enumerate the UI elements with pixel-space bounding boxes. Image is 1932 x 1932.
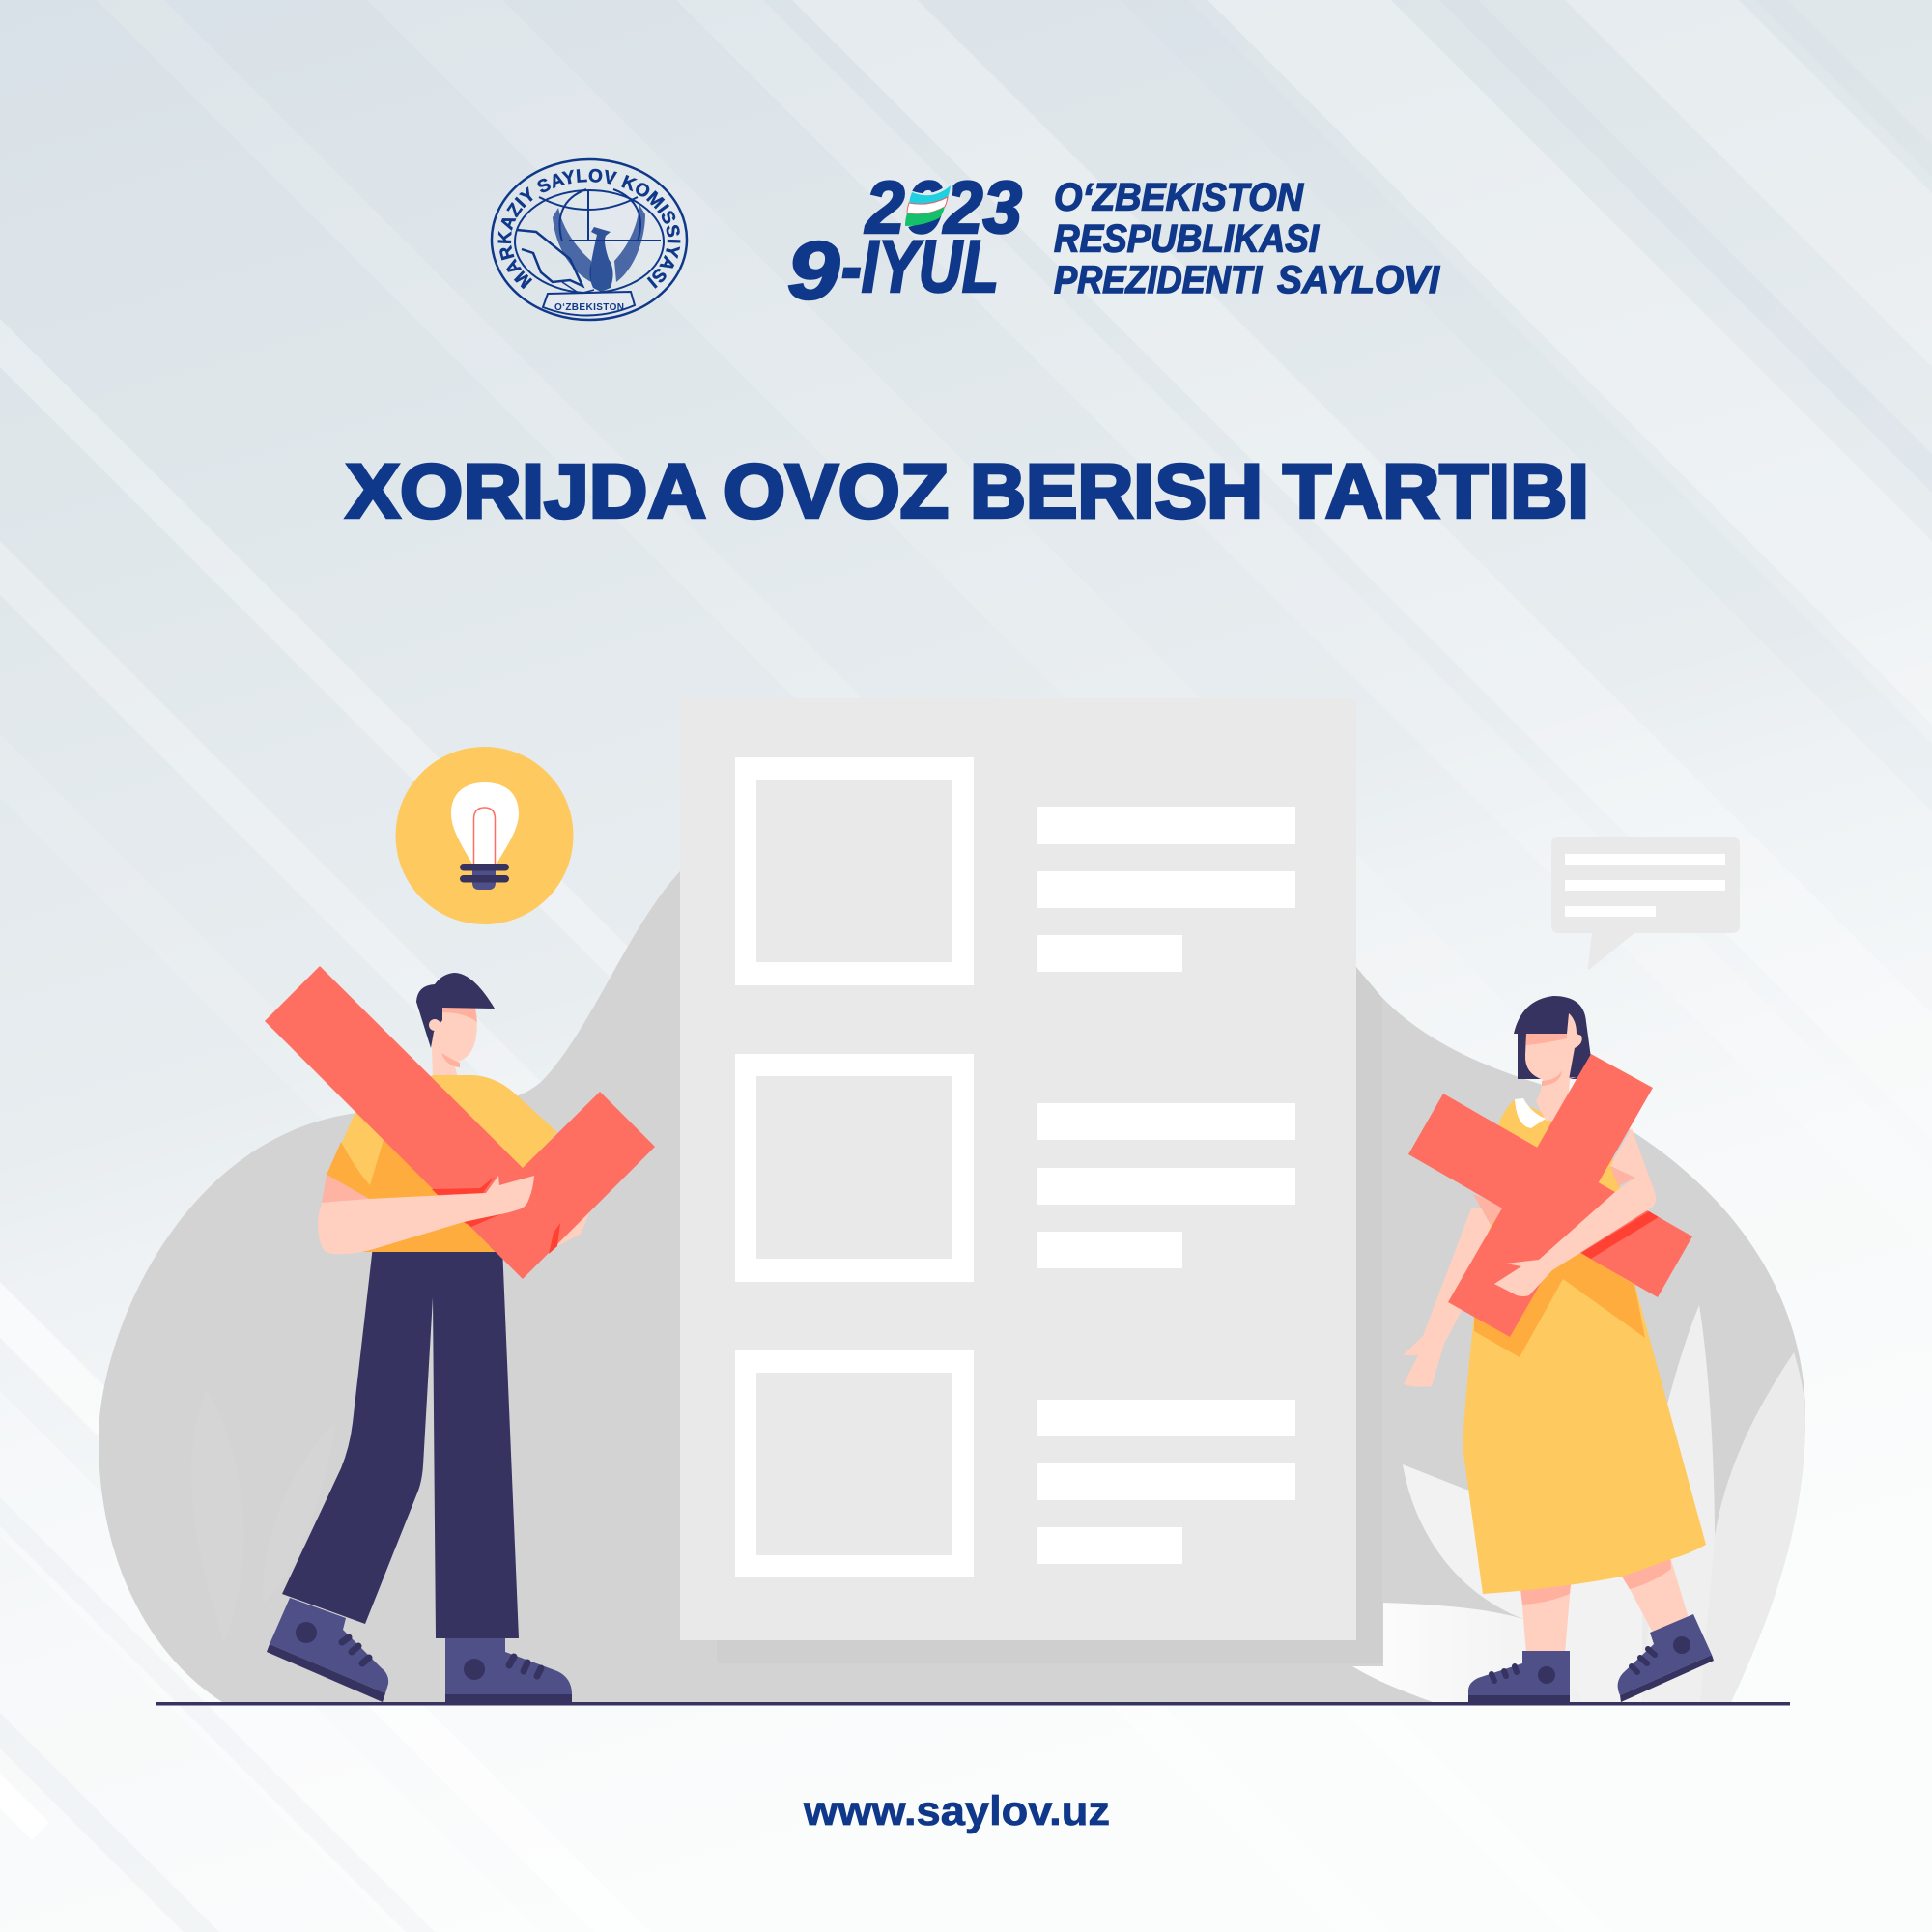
logo: election commission emblem: MARKAZIY SAYLOV KOMISSIYASI	[498, 168, 680, 290]
front shoe	[445, 1638, 572, 1703]
title	[346, 448, 1589, 533]
X mark	[1408, 1054, 1692, 1337]
arm shade	[1610, 1166, 1635, 1186]
logo: 2023 9-IYUL date mark: -IYUL	[841, 226, 999, 308]
dress folds	[1474, 1253, 1645, 1357]
leaves right of ballot	[1352, 1305, 1805, 1702]
logo text: election name: RESPUBLIKASI	[1054, 218, 1320, 261]
right arm	[1494, 1128, 1656, 1296]
ballot row 2	[735, 1054, 1295, 1282]
title: TARTIBI	[1283, 448, 1589, 533]
title: OVOZ	[724, 448, 949, 533]
grey background blob	[99, 871, 1805, 1702]
back shoe	[267, 1598, 388, 1702]
left arm	[1403, 1194, 1507, 1387]
trousers	[282, 1246, 519, 1638]
faint leaves in blob	[191, 1389, 336, 1642]
logo: 2023 9-IYUL date mark	[787, 167, 1022, 316]
logo: 2023 9-IYUL date mark: 9	[787, 225, 839, 316]
head and neck	[1514, 996, 1591, 1128]
logo text: election name: PREZIDENTI	[1054, 259, 1263, 301]
man figure	[265, 966, 655, 1703]
check shadows	[432, 1177, 560, 1254]
logo text: election name	[1054, 176, 1440, 301]
ballot paper	[680, 698, 1382, 1663]
title: XORIJDA	[346, 448, 706, 533]
woman figure	[1403, 996, 1714, 1704]
logo: election commission emblem: O‘ZBEKISTON	[554, 302, 624, 313]
logo: 2023 9-IYUL date mark: 2023	[864, 167, 1022, 249]
legs	[1520, 1557, 1689, 1654]
ballot row 3	[735, 1350, 1295, 1577]
X strip	[1581, 1211, 1659, 1259]
icon: waving flag	[904, 185, 951, 226]
website url: www.saylov.uz	[803, 1788, 1110, 1834]
logo text: election name: O‘ZBEKISTON	[1054, 176, 1304, 218]
title: BERISH	[970, 448, 1263, 533]
icon: light bulb	[396, 747, 574, 924]
hand behind check	[541, 1212, 589, 1246]
check mark	[265, 966, 655, 1279]
yellow dress	[1463, 1099, 1706, 1594]
yellow shirt	[322, 1075, 557, 1252]
neck and head	[416, 973, 495, 1082]
man arm	[318, 1176, 534, 1254]
X shadow	[1495, 1281, 1541, 1304]
ballot row 1	[735, 757, 1295, 985]
right shoe	[1618, 1614, 1714, 1702]
speech bubble	[1551, 837, 1740, 970]
ground line	[156, 1702, 1790, 1706]
logo text: election name: SAYLOVI	[1277, 259, 1440, 301]
left shoe	[1468, 1651, 1570, 1704]
